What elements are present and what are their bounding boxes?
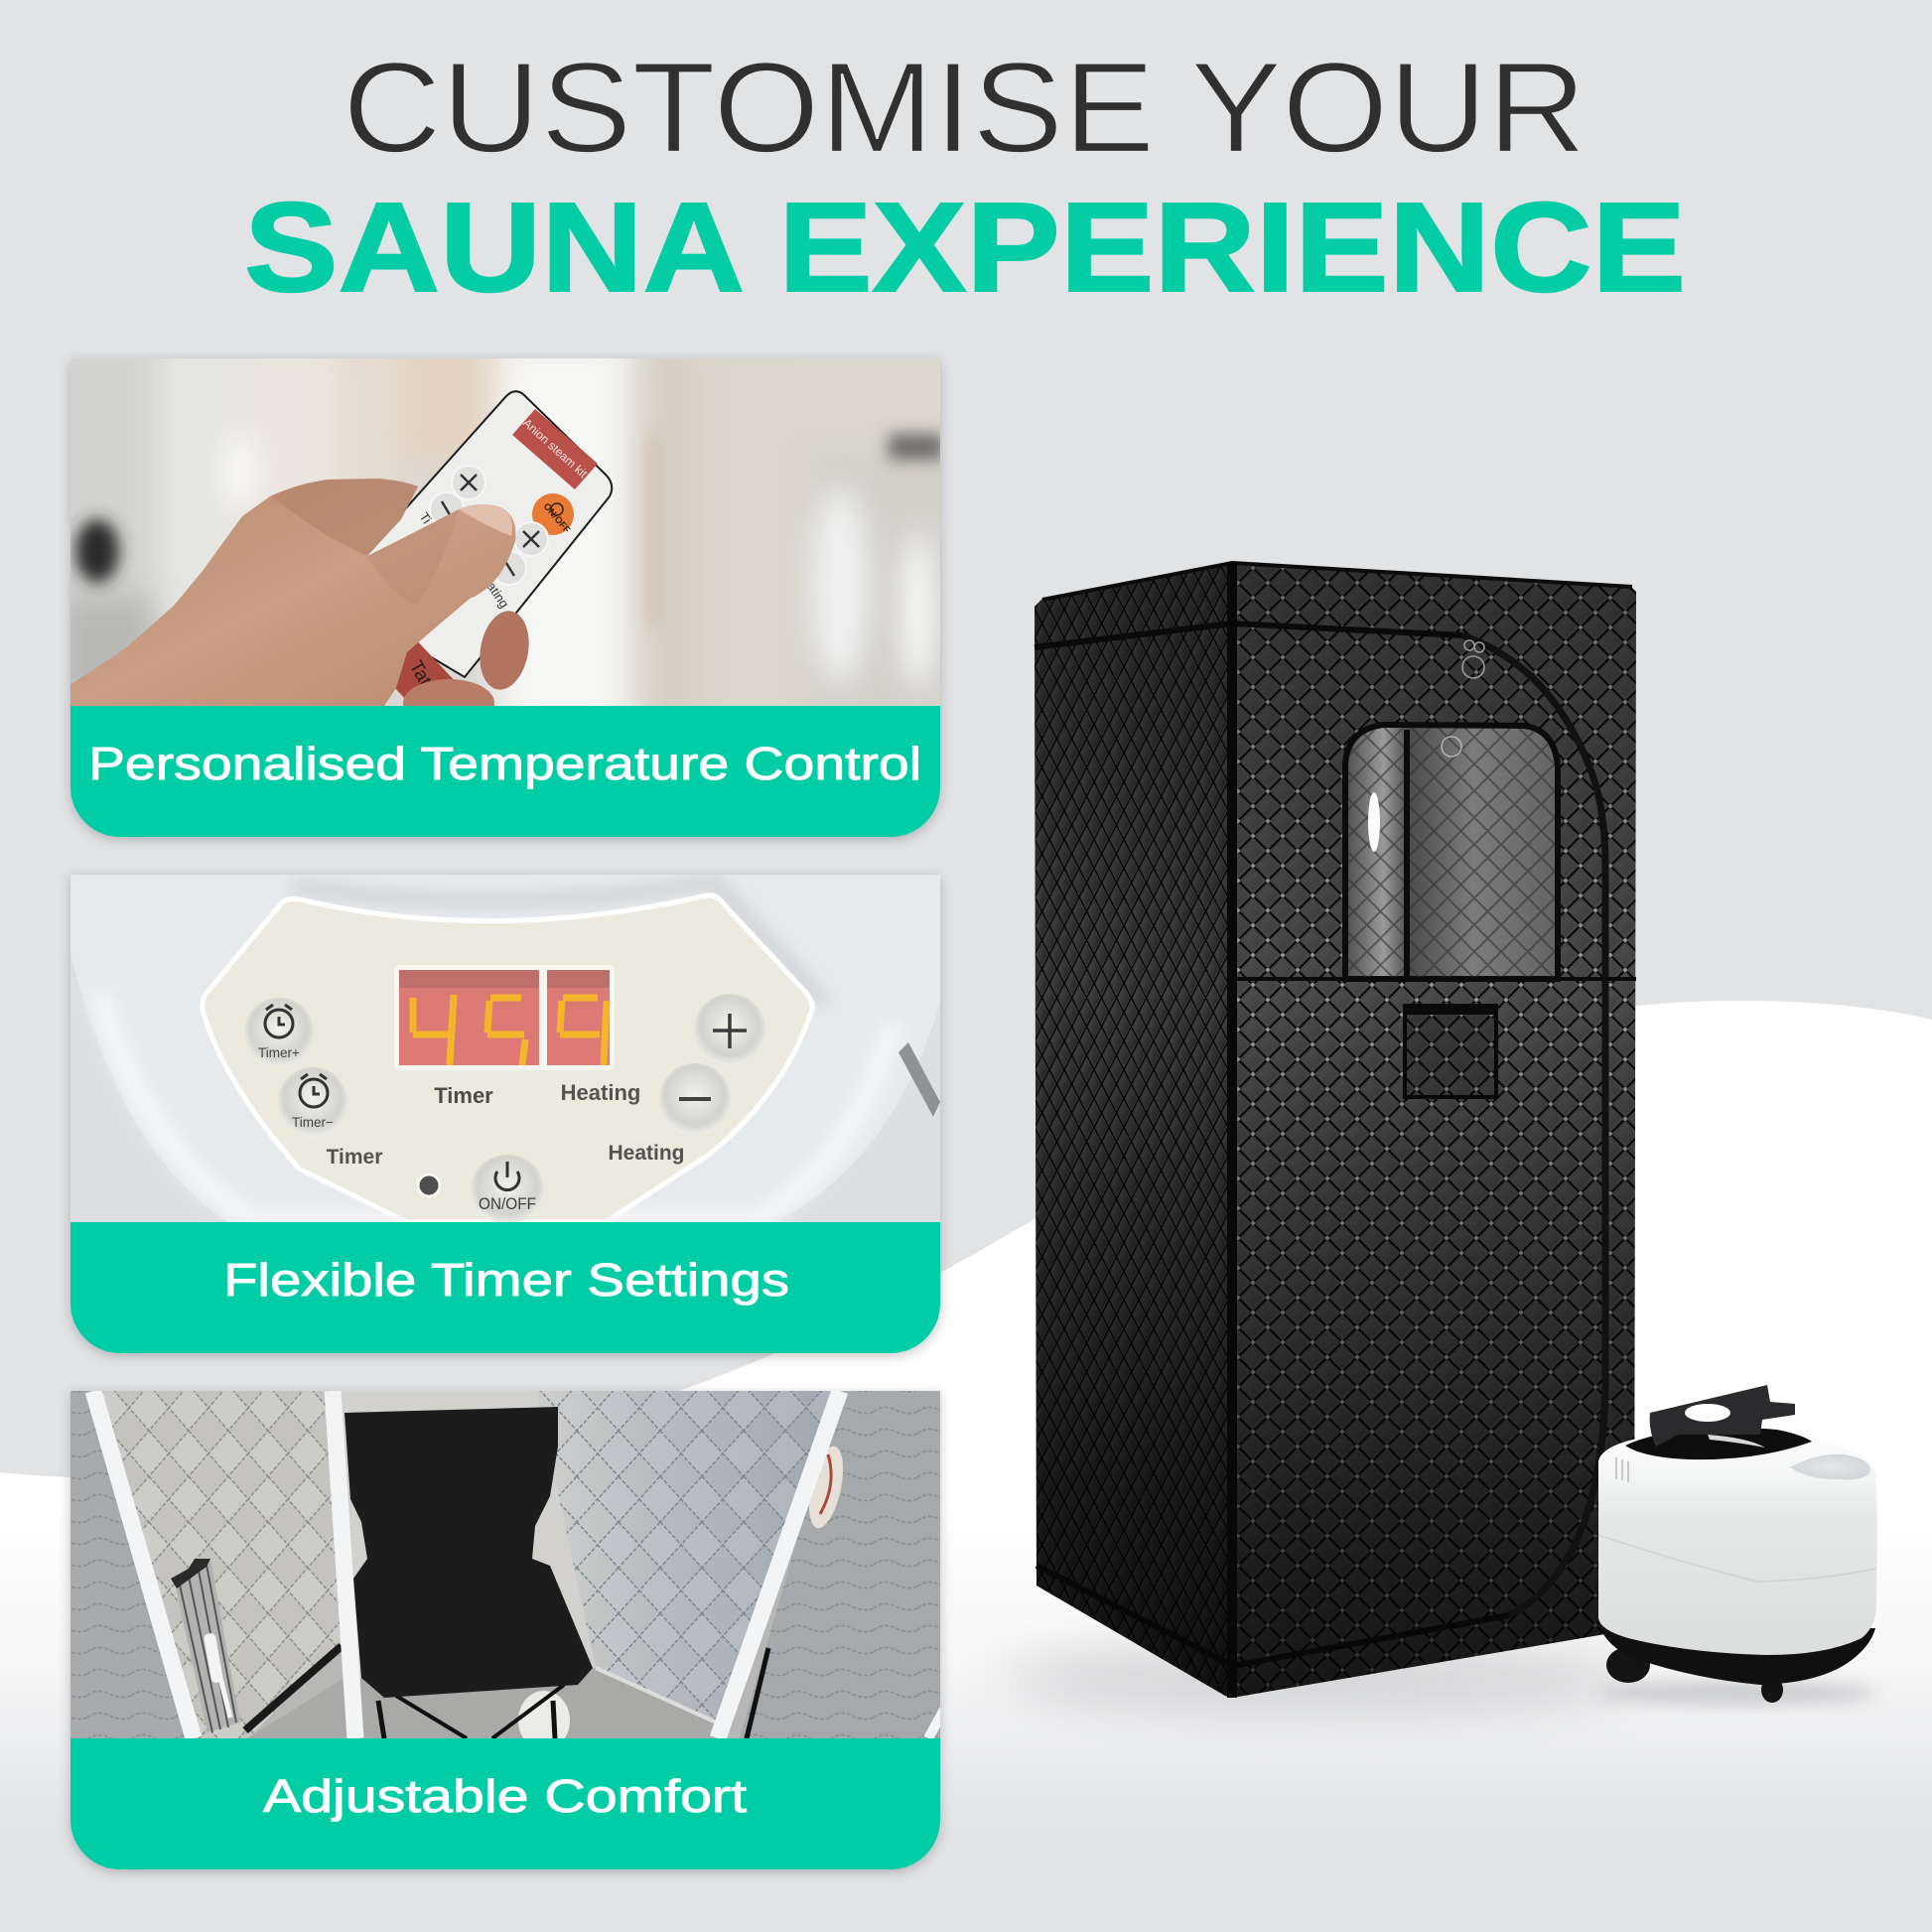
remote red label <box>512 409 598 489</box>
corner seam <box>1227 562 1237 1698</box>
window zip pull <box>1442 737 1461 757</box>
lid highlight <box>1708 1435 1765 1448</box>
remote plus button <box>452 466 485 499</box>
thumb shading <box>367 509 459 578</box>
poles <box>93 1391 840 1738</box>
floor strap <box>245 1646 342 1730</box>
display label: timer: Timer <box>434 1083 493 1108</box>
console surround <box>70 953 940 1222</box>
plus button <box>694 994 765 1065</box>
steamer shadow <box>1598 1681 1876 1705</box>
pocket <box>1405 1006 1496 1097</box>
panel label: Flexible Timer Settings <box>223 1254 789 1306</box>
remote heating plus button <box>514 522 548 556</box>
beige console <box>203 896 812 1222</box>
door zip <box>1462 635 1605 1615</box>
steamer vents <box>1616 1457 1628 1482</box>
horizontal seam <box>1234 977 1636 981</box>
chair legs <box>378 1648 768 1738</box>
hand <box>69 479 515 706</box>
timer plus button: Timer+ <box>258 1045 300 1060</box>
chair <box>345 1407 593 1698</box>
right wall <box>536 1391 840 1725</box>
zip pull <box>1462 640 1484 678</box>
floor <box>247 1668 721 1738</box>
panel label: Personalised Temperature Control <box>88 738 921 789</box>
minus button <box>659 1063 731 1135</box>
remote control <box>367 390 614 698</box>
display label: heating: Heating <box>561 1080 640 1105</box>
thumbnail <box>459 504 512 536</box>
pole highlight corner <box>928 1708 945 1738</box>
lower label: heating: Heating <box>608 1142 685 1165</box>
bottom band seam <box>1036 1566 1509 1666</box>
far right wall <box>740 1391 940 1738</box>
panel base <box>70 358 940 837</box>
side grey detail <box>898 1042 940 1117</box>
left face <box>1035 562 1232 1698</box>
remote label text: Anion steam kit <box>520 416 591 482</box>
steamer feet <box>1606 1647 1783 1703</box>
console inset shadow <box>293 882 824 1003</box>
panel base <box>70 875 940 1353</box>
far left wall <box>70 1391 194 1738</box>
timer plus button <box>244 998 314 1067</box>
steamer <box>1598 1385 1877 1705</box>
ground shadow <box>1003 1644 1638 1712</box>
photo: sauna interior with chair <box>70 1391 945 1750</box>
title line 2: SAUNA EXPERIENCE <box>244 177 1686 319</box>
digit 3 <box>560 998 607 1065</box>
remote minus button <box>430 492 464 526</box>
panel: timer settings <box>70 875 940 1353</box>
steamer base <box>1598 1623 1875 1685</box>
window highlight <box>1368 792 1380 852</box>
left wall <box>93 1391 347 1738</box>
on off button: ON/OFF <box>479 1194 536 1213</box>
wall device <box>803 1444 849 1531</box>
title <box>244 35 1686 319</box>
steamer body <box>1598 1428 1877 1655</box>
ring finger <box>480 611 529 690</box>
back wall <box>333 1391 596 1688</box>
title line 1: CUSTOMISE YOUR <box>343 35 1587 180</box>
roof zip line <box>1035 623 1462 647</box>
remote heating text: ating <box>484 579 512 611</box>
indicator light <box>418 1174 440 1196</box>
lower finger <box>403 679 494 706</box>
remote lower red strip <box>395 642 453 698</box>
panel base <box>70 1391 940 1869</box>
top edge <box>1042 563 1632 600</box>
remote power button <box>532 493 574 536</box>
on off button <box>471 1155 544 1224</box>
remote timer text: Ti <box>417 509 435 526</box>
heater rack <box>171 1559 240 1732</box>
lower label: timer: Timer <box>327 1146 382 1169</box>
remote heating minus button <box>492 551 526 585</box>
panel label: Adjustable Comfort <box>263 1770 747 1822</box>
digit 1 <box>413 995 454 1065</box>
photo: hand holding remote <box>70 358 940 706</box>
remote power button: ON/OFF <box>541 501 572 536</box>
steamer handle <box>1650 1385 1795 1447</box>
digit 2 <box>487 998 525 1065</box>
front face <box>1232 562 1636 1698</box>
steamer seam <box>1598 1535 1876 1582</box>
window zip <box>1404 730 1410 979</box>
sauna tent <box>1003 562 1638 1712</box>
steamer control panel <box>1790 1454 1870 1479</box>
timer minus button <box>278 1067 347 1137</box>
timer minus button: Timer− <box>292 1115 334 1130</box>
steamer lid <box>1625 1428 1812 1459</box>
panel: temperature control <box>50 338 958 837</box>
tent shading <box>1035 562 1636 1698</box>
display <box>394 965 615 1070</box>
panel: adjustable comfort <box>70 1391 945 1869</box>
photo: control console <box>70 875 940 1224</box>
window <box>1345 725 1558 979</box>
remote lower strip text: Tato <box>405 657 441 699</box>
hand shading <box>270 479 418 556</box>
